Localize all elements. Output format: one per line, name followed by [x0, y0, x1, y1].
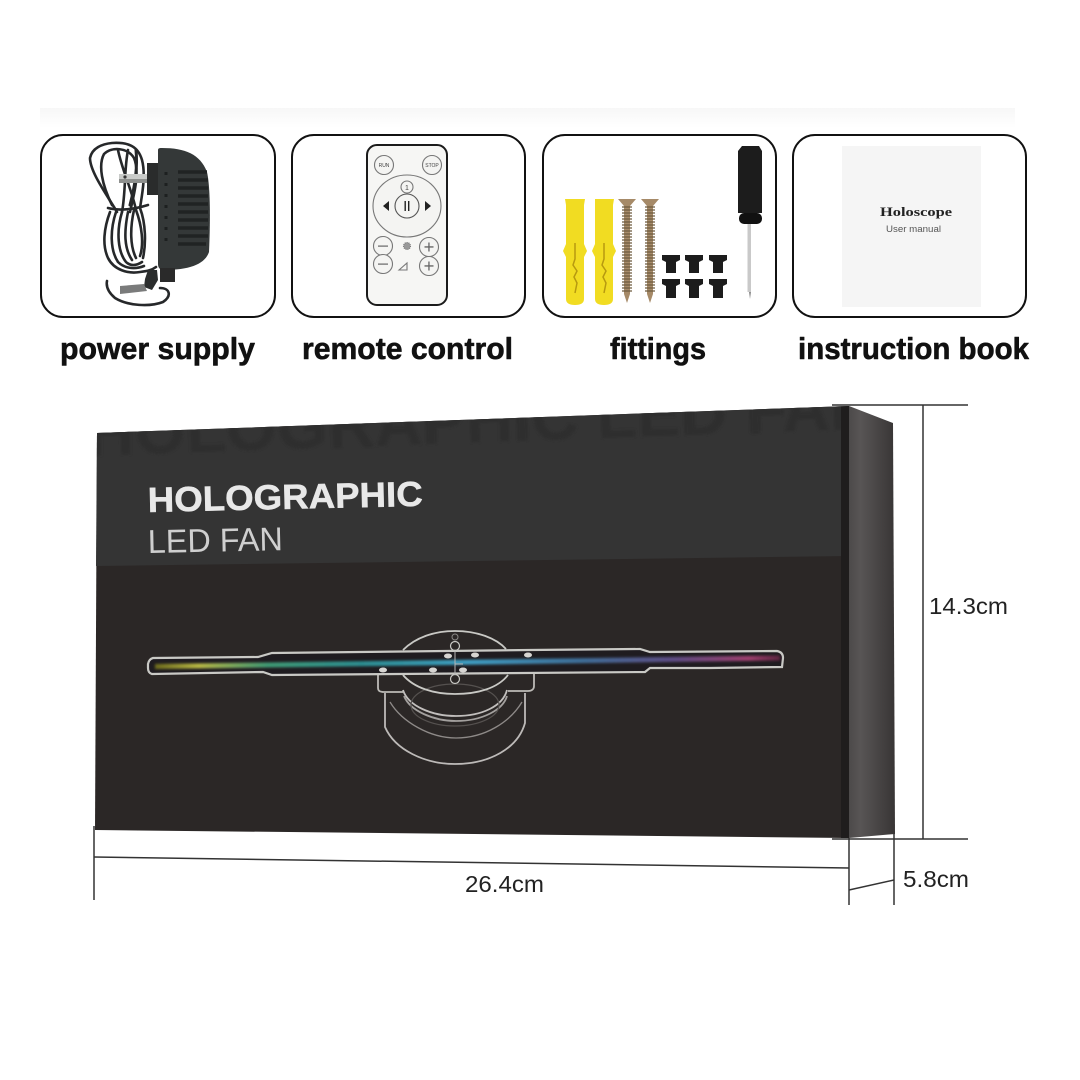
label: instruction book: instruction book — [798, 331, 1030, 366]
panel: remote control — [292, 135, 525, 317]
icon: black bolts — [662, 255, 727, 298]
dimension: depth: 5.8cm — [903, 866, 969, 892]
ghost box lettering: HOLOGRAPHIC LED FAN — [86, 368, 878, 470]
fan blades — [148, 649, 783, 675]
label: fittings: fittings — [610, 331, 706, 366]
panel: fittings — [543, 135, 776, 317]
panel: power supply — [41, 135, 275, 317]
fan LED strip — [155, 656, 780, 669]
panel: remote control: RUN — [379, 163, 390, 169]
fan base — [385, 684, 525, 764]
heading: HOLOGRAPHIC: HOLOGRAPHIC — [147, 475, 423, 520]
icon: remote body — [367, 145, 447, 305]
manual subtitle: User manual — [886, 224, 941, 234]
icon: screwdriver — [738, 146, 762, 299]
box side face — [849, 406, 895, 838]
box front lower face — [95, 406, 849, 838]
heading: LED FAN: LED FAN — [147, 520, 283, 560]
dimension lines — [94, 405, 968, 905]
panel: remote control: 1 — [405, 185, 409, 192]
icon: remote buttons — [373, 156, 442, 276]
fan hub fasteners — [379, 652, 532, 672]
dimension: height: 14.3cm — [929, 593, 1008, 619]
label: power supply: power supply — [60, 331, 256, 366]
icon: wood screws — [618, 199, 659, 303]
manual title: Holoscope — [880, 205, 953, 219]
fan hub disc — [403, 631, 508, 694]
panel: instruction book — [793, 135, 1026, 317]
product box — [86, 368, 895, 838]
faint top band — [40, 108, 1015, 128]
label: remote control: remote control — [302, 331, 513, 366]
icon: power adapter cable — [90, 143, 169, 305]
panel: remote control: STOP — [425, 163, 439, 169]
icon: power adapter body — [119, 148, 210, 294]
fan illustration — [148, 631, 783, 764]
box front edge shade — [841, 406, 849, 838]
icon: manual cover — [842, 146, 981, 307]
box front upper band — [96, 406, 849, 566]
infographic canvas — [40, 134, 1030, 905]
icon: yellow wall anchors — [563, 199, 616, 305]
dimension: width: 26.4cm — [465, 871, 544, 897]
fan mount bracket — [378, 673, 534, 692]
